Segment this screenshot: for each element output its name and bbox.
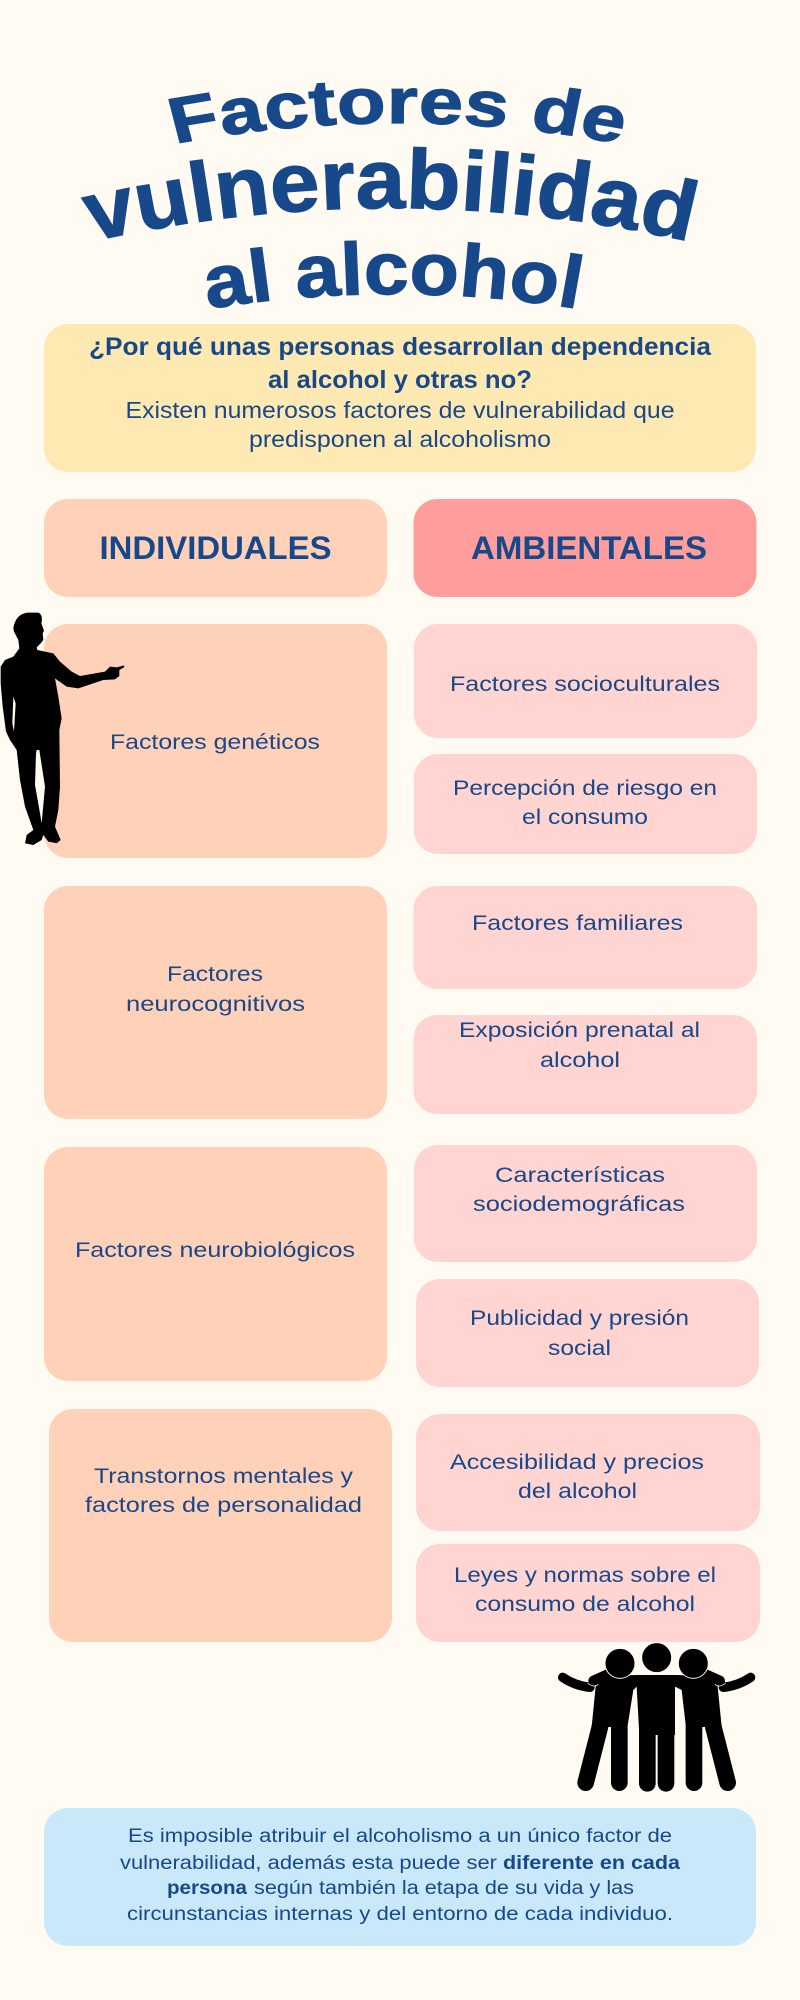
panel: exposición prenatal: alcohol [540,1049,620,1072]
icon: man pointing silhouette [1,613,124,845]
panel: exposición prenatal: Exposición prenatal al [459,1019,700,1042]
panel: características sociodemográficas: sociodemográficas [473,1193,685,1216]
panel: factores socioculturales: Factores socioculturales [450,673,720,696]
panel: intro question: predisponen al alcoholismo [249,426,551,452]
panel: conclusion: según también la etapa de su vida y las [254,1878,634,1899]
panel: intro question: Existen numerosos factores de vulnerabilidad que [126,397,674,423]
panel: percepción de riesgo [414,754,757,854]
title [80,82,698,308]
panel: conclusion [44,1808,756,1946]
panel: factores socioculturales [414,624,757,738]
panel: accesibilidad y precios: del alcohol [518,1480,637,1503]
panel: factores neurocognitivos: Factores [167,963,263,986]
panel: accesibilidad y precios [416,1414,760,1531]
panel: accesibilidad y precios: Accesibilidad y precios [450,1451,704,1474]
title: al alcohol [206,240,583,308]
panel: factores familiares: Factores familiares [472,912,683,935]
panel: conclusion: persona [167,1878,247,1899]
panel: exposición prenatal [414,1015,757,1114]
panel: factores familiares [414,886,757,989]
panel: características sociodemográficas [414,1145,757,1262]
panel: intro question: al alcohol y otras no? [268,366,532,394]
heading: ambientales [414,499,756,597]
title: Factores de [168,82,624,144]
heading: individuales [44,499,387,597]
panel: leyes y normas [416,1544,760,1642]
panel: intro question: ¿Por qué unas personas desarrollan dependencia [89,333,712,361]
panel: publicidad y presión social: Publicidad y presión [470,1307,689,1330]
panel: factores neurobiológicos: Factores neurobiológicos [75,1239,355,1262]
panel: publicidad y presión social: social [548,1337,611,1360]
title: vulnerabilidad [80,146,698,241]
panel: percepción de riesgo: el consumo [522,806,648,829]
panel: factores genéticos [44,624,387,858]
panel: leyes y normas: Leyes y normas sobre el [454,1564,716,1587]
panel: trastornos mentales: Transtornos mentales y [94,1465,354,1488]
panel: trastornos mentales [49,1409,392,1642]
panel: factores neurocognitivos: neurocognitivos [126,993,305,1016]
panel: características sociodemográficas: Características [495,1164,665,1187]
panel: trastornos mentales: factores de personalidad [85,1494,362,1517]
panel: leyes y normas: consumo de alcohol [475,1593,695,1616]
panel: intro question [44,324,756,472]
panel: conclusion: vulnerabilidad, además esta puede ser [120,1853,498,1874]
panel: factores neurocognitivos [44,886,387,1119]
panel: percepción de riesgo: Percepción de riesgo en [453,777,717,800]
icon: three people embracing [563,1643,751,1783]
panel: factores genéticos: Factores genéticos [110,731,320,754]
heading: ambientales: AMBIENTALES [471,530,707,566]
panel: publicidad y presión social [416,1279,759,1387]
panel: conclusion: Es imposible atribuir el alcoholismo a un único factor de [128,1826,672,1847]
panel: conclusion: diferente en cada [503,1853,680,1874]
panel: conclusion: circunstancias internas y del entorno de cada individuo. [127,1904,673,1925]
heading: individuales: INDIVIDUALES [100,530,332,566]
panel: factores neurobiológicos [44,1147,387,1381]
